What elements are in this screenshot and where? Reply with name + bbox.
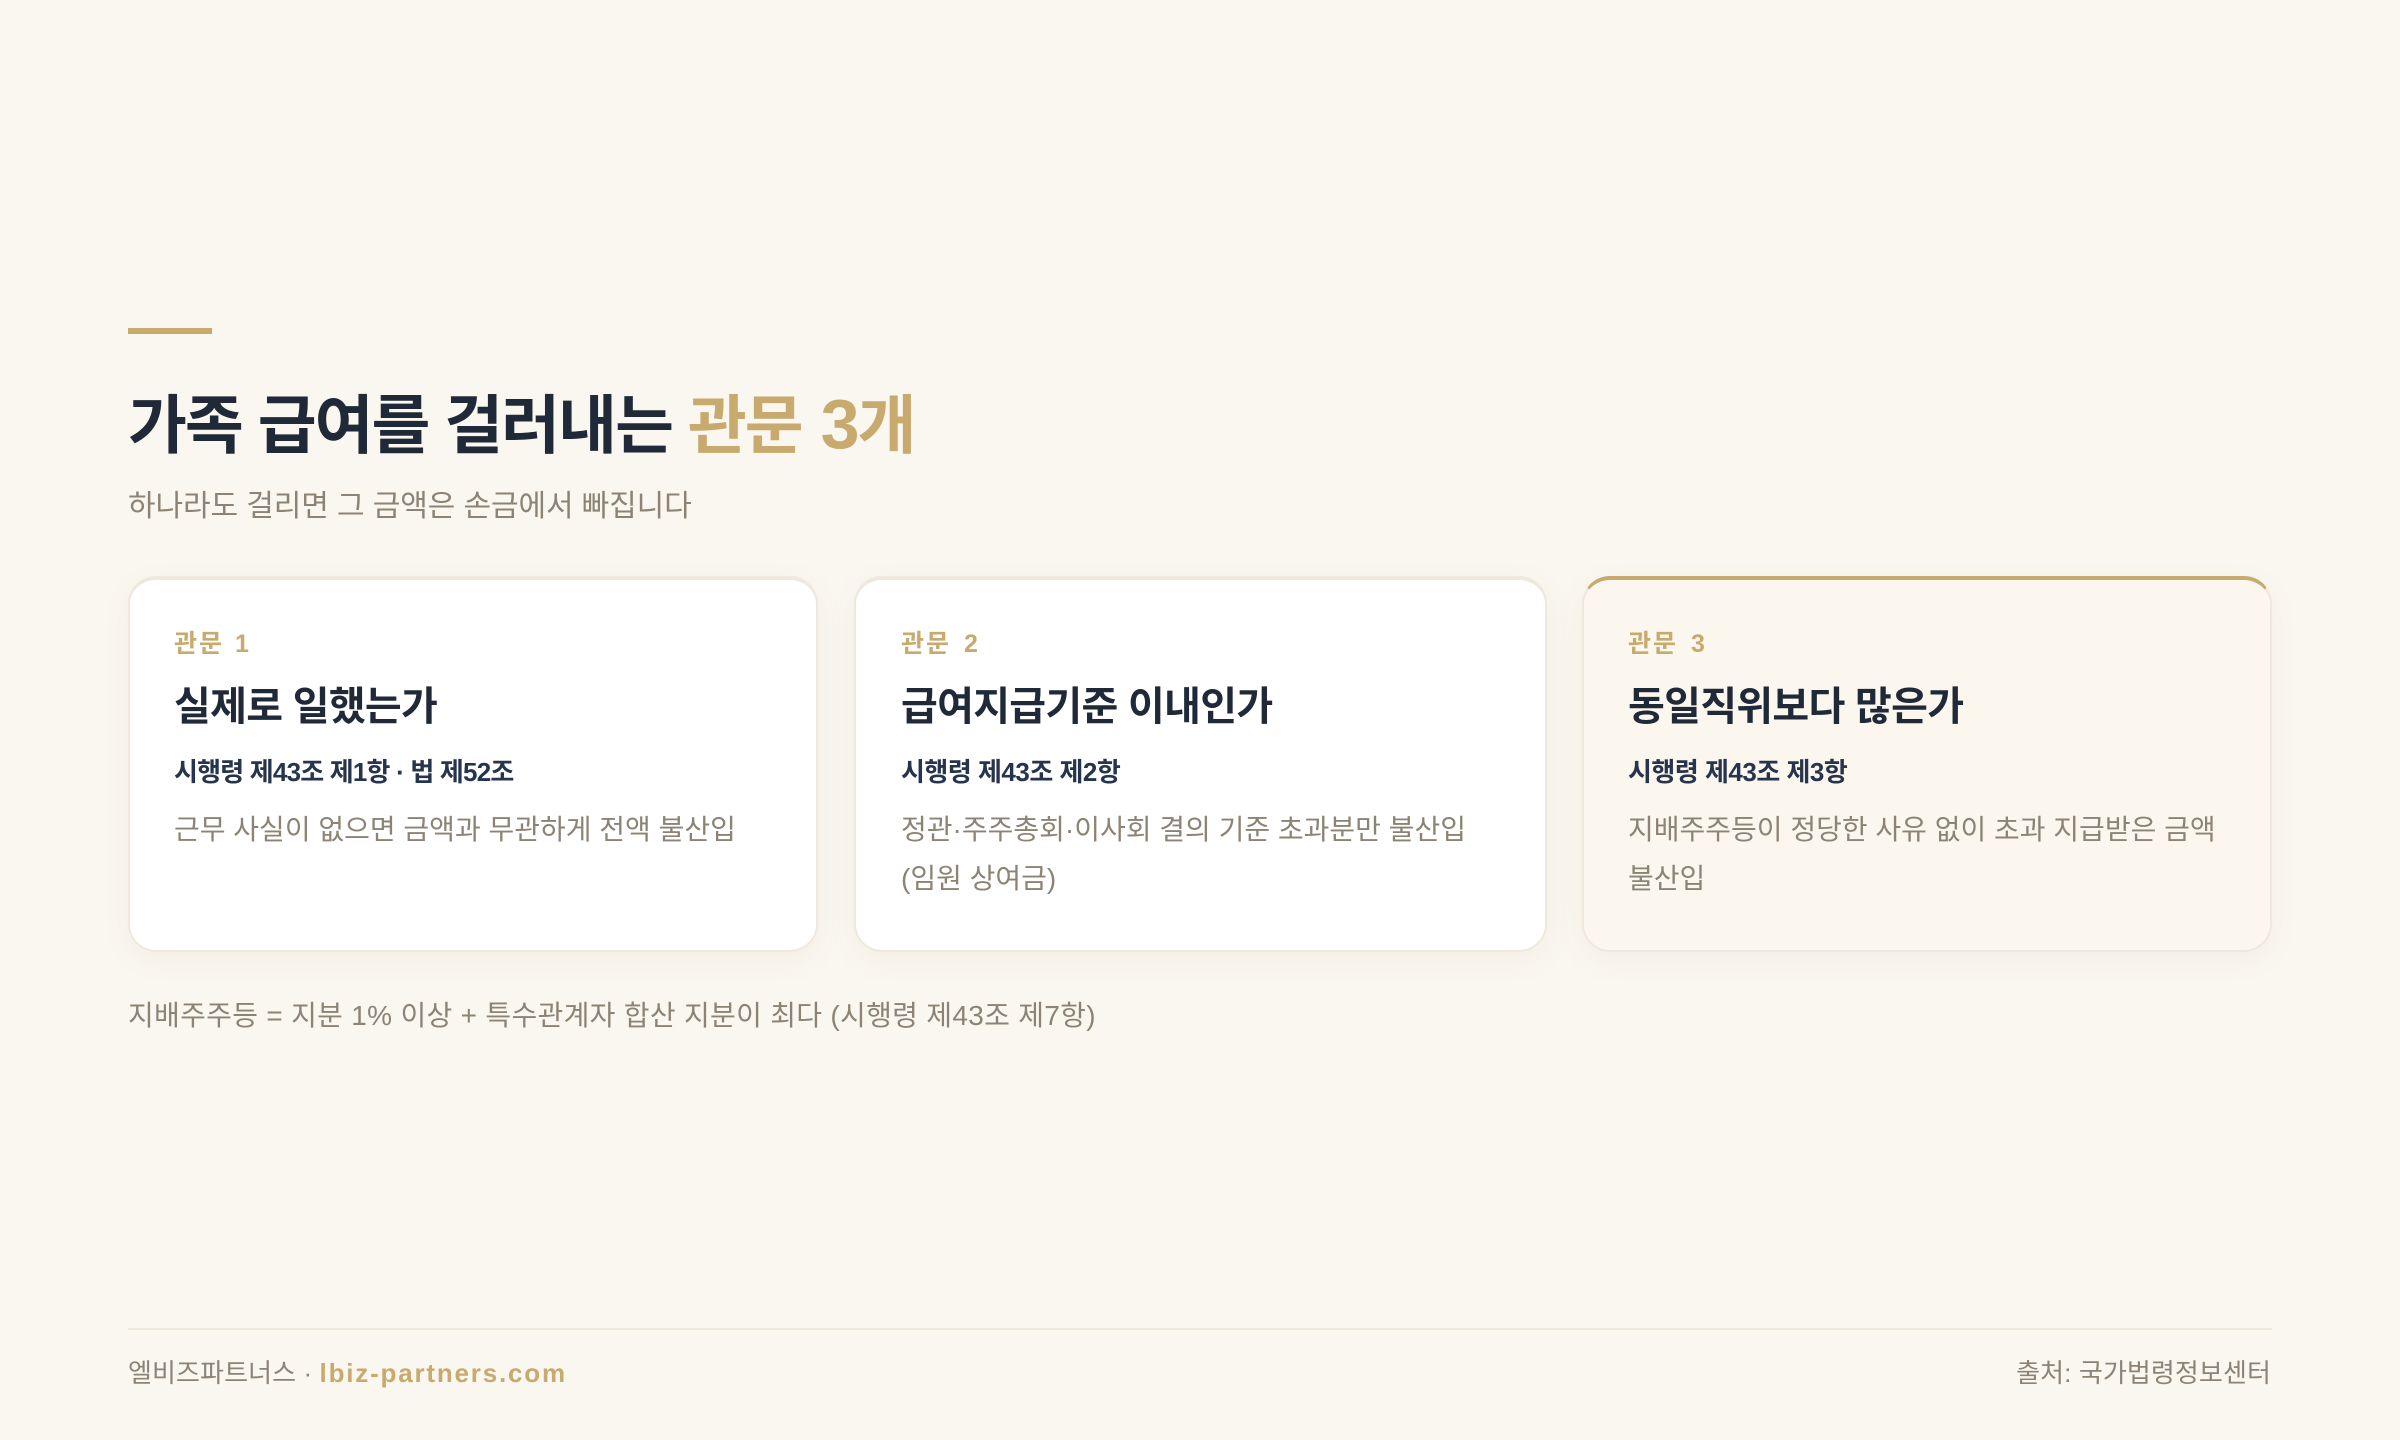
subtitle: 하나라도 걸리면 그 금액은 손금에서 빠집니다 [128,490,692,523]
gate 3 description [1628,814,2216,894]
gate 1 heading: 실제로 일했는가 [174,685,437,729]
footer divider [128,1328,2272,1330]
gate 2 description [901,814,1466,894]
gate 2 heading: 급여지급기준 이내인가 [901,685,1272,729]
gate 3 heading: 동일직위보다 많은가 [1628,685,1963,729]
gate 3 description: 불산입 [1628,863,1705,894]
footer brand: 엘비즈파트너스 · lbiz-partners.com [128,1358,567,1388]
gate 2 description: (임원 상여금) [901,863,1056,894]
panel: gate 2 [854,576,1547,952]
gate 1 label: 관문 1 [174,630,251,658]
gate 1 legal reference: 시행령 제43조 제1항 · 법 제52조 [174,757,513,787]
gate 2 description: 정관·주주총회·이사회 결의 기준 초과분만 불산입 [901,814,1466,845]
gate 3 description: 지배주주등이 정당한 사유 없이 초과 지급받은 금액 [1628,814,2216,845]
panel: gate 1 [128,576,818,952]
gate 3 label: 관문 3 [1628,630,1707,658]
panel: gate 3 (highlighted) [1582,576,2272,952]
gate 2 legal reference: 시행령 제43조 제2항 [901,757,1120,787]
title: 가족 급여를 걸러내는 관문 3개 [128,385,914,463]
gate 1 description: 근무 사실이 없으면 금액과 무관하게 전액 불산입 [174,814,736,845]
definition note: 지배주주등 = 지분 1% 이상 + 특수관계자 합산 지분이 최다 (시행령 제43조 제7항) [128,1000,1096,1031]
gate 2 label: 관문 2 [901,630,980,658]
accent bar [128,328,212,334]
gate 3 legal reference: 시행령 제43조 제3항 [1628,757,1847,787]
footer source: 출처: 국가법령정보센터 [2016,1358,2271,1388]
